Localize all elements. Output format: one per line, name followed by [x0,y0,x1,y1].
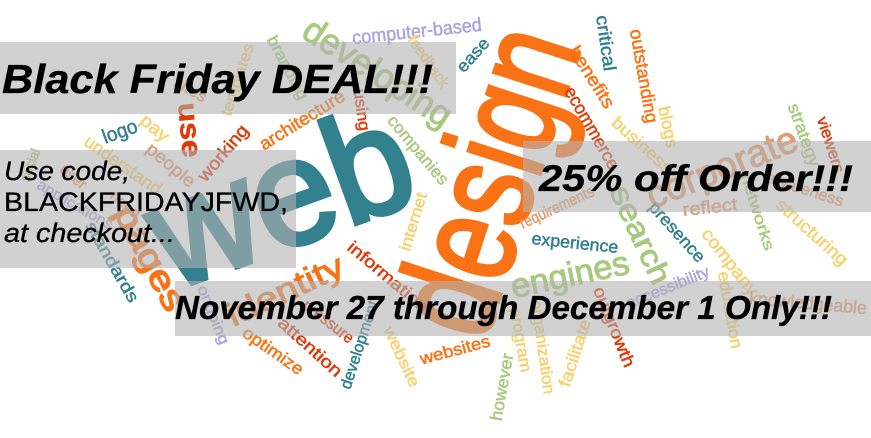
word: structuring: structuring [772,194,852,270]
word: user: user [56,161,90,193]
word: computer-based: computer-based [351,15,483,49]
word: organization: organization [527,299,557,395]
word: engines: engines [507,244,633,306]
word: education: education [714,270,746,350]
word: ongoing: ongoing [194,283,232,347]
word: branding: branding [263,33,311,103]
word: knowledgeable: knowledgeable [748,288,868,318]
word: ease: ease [453,34,493,76]
word: need: need [107,188,143,222]
word: templates: templates [218,42,258,118]
word: requirements: requirements [517,183,597,233]
word: people: people [142,139,200,191]
word: information: information [344,238,432,316]
word: feedback: feedback [404,33,453,92]
word: networks: networks [737,171,777,253]
word: accessibility: accessibility [624,264,712,312]
word: corporate: corporate [640,119,804,217]
callout: date range: November 27 through December 1 Only!!! [175,289,832,326]
word: web: web [124,71,435,321]
text: code value: BLACKFRIDAYJFWD, [4,187,288,217]
word: pages: pages [106,198,194,318]
word: awareness: awareness [764,170,846,210]
word: companies: companies [383,111,453,189]
word: search: search [603,180,677,290]
word: understand: understand [80,131,166,199]
word: identity: identity [221,247,350,333]
word: pay: pay [136,110,174,146]
word: use: use [172,101,208,159]
text block: coupon code [4,156,288,248]
word: attention: attention [274,313,346,381]
word: facilitate: facilitate [555,317,595,389]
word: social: social [17,146,43,184]
word: presence: presence [645,198,709,266]
word: sites: sites [171,74,209,106]
word: applications: applications [34,176,116,234]
callout: 25% off order: 25% off Order!!! [538,158,853,199]
word: ecommerce: ecommerce [560,83,624,173]
text: at checkout: at checkout... [4,218,175,248]
word: using: using [350,88,372,132]
word: working: working [193,121,253,186]
word: outstanding: outstanding [626,27,662,125]
word: internet: internet [397,190,431,253]
word: experience: experience [531,229,619,257]
panel: 25% off band [523,141,871,212]
word: viewers: viewers [813,115,847,175]
panel: use code band [0,150,296,268]
word: websites: websites [417,332,492,369]
word: website: website [379,323,422,390]
panel: Black Friday deal band [0,42,456,114]
word: architecture: architecture [256,86,348,154]
word: developing: developing [296,9,460,135]
word: critical: critical [592,14,620,72]
word: business: business [608,113,676,177]
word: optimize: optimize [239,323,307,379]
word: standards: standards [81,218,143,306]
word: however: however [487,352,517,422]
text: use code: Use code, [4,156,130,186]
word: blogs: blogs [654,104,682,150]
word: company: company [697,224,763,300]
word: benefits: benefits [565,42,619,112]
word: outgrowth: outgrowth [589,284,639,370]
word: strategy: strategy [784,101,824,170]
panel: date band [175,281,871,336]
word: logo: logo [99,116,141,148]
word: program: program [506,307,534,373]
word: reflect: reflect [682,194,738,220]
word: pressure: pressure [299,297,357,347]
word: development: development [338,298,382,391]
heading: Black Friday DEAL: Black Friday DEAL!!! [2,56,433,102]
